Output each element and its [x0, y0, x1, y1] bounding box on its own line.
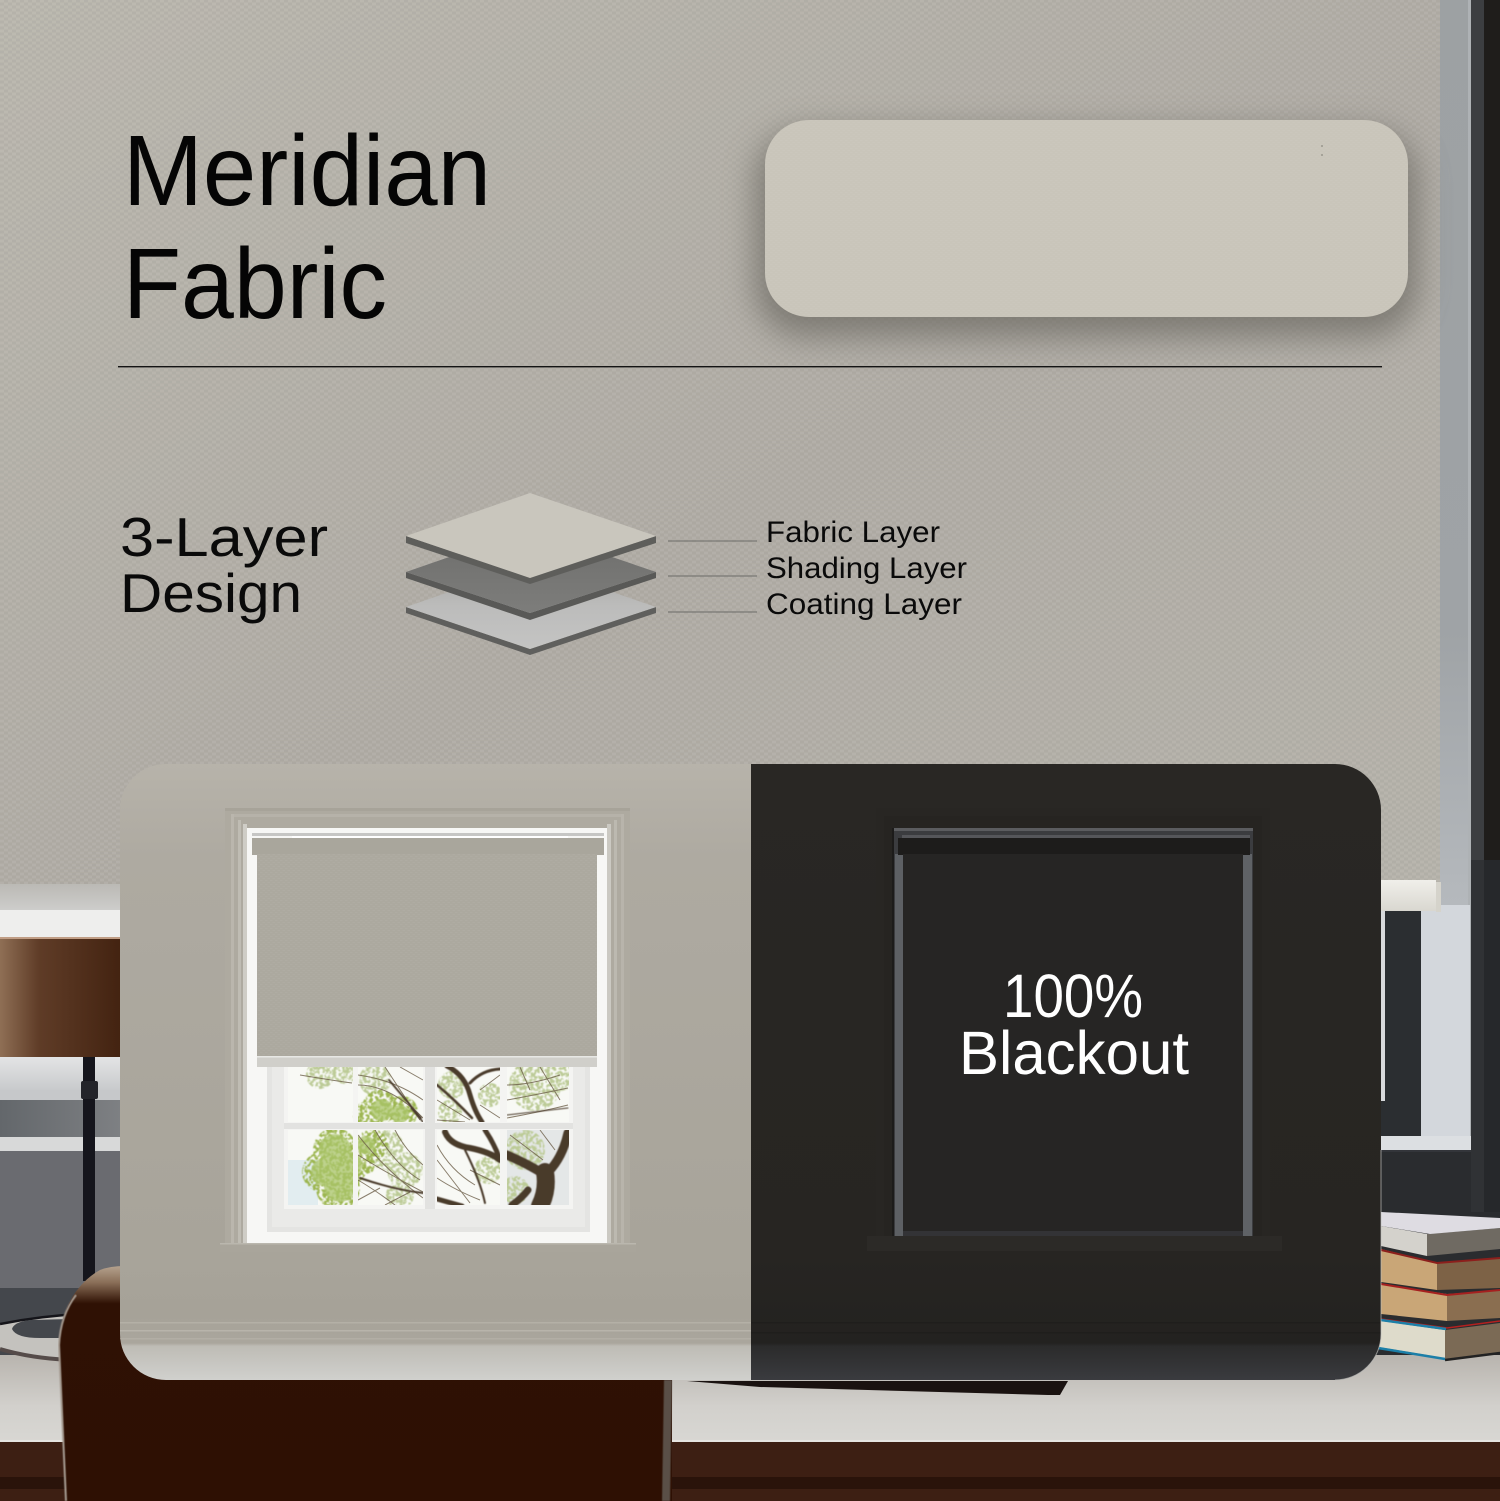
- window sill: [220, 1243, 636, 1244]
- chair: [59, 1266, 672, 1501]
- laptop edge on desk: [687, 1381, 1068, 1395]
- coating layer: [406, 564, 656, 655]
- label: shading layer: Shading Layer: [766, 552, 967, 585]
- window sash: [267, 1060, 590, 1232]
- subheading: 3-Layer Design: [120, 506, 328, 624]
- subheading: 3-Layer Design: 3-Layer: [120, 506, 328, 568]
- label: fabric layer: Fabric Layer: [766, 516, 940, 549]
- layer labels: [668, 516, 967, 621]
- foliage light: [306, 1067, 569, 1205]
- books stack: [1378, 1212, 1500, 1360]
- fabric swatch: [755, 120, 1418, 337]
- trees through panes: [288, 1067, 569, 1205]
- desk: [0, 1355, 1500, 1501]
- dark window sill: [867, 1236, 1282, 1251]
- label: coating layer: Coating Layer: [766, 588, 962, 621]
- window casing: [225, 808, 630, 1244]
- roller blind: [252, 833, 604, 1067]
- subheading: 3-Layer Design: Design: [120, 562, 302, 624]
- panel: dark side: [751, 764, 1381, 1380]
- panel: light side: [120, 764, 751, 1380]
- wall fabric blind: [0, 0, 1440, 884]
- blackout label: Blackout: [959, 1019, 1189, 1087]
- left outdoor window bands: [0, 880, 130, 1358]
- foliage dense: [302, 1090, 418, 1210]
- comparison card: [120, 764, 1381, 1380]
- dark roller blind: [898, 835, 1250, 1236]
- title: [123, 115, 491, 340]
- blackout label: 100%: [1003, 962, 1143, 1030]
- layer diagram: [406, 493, 656, 655]
- dark window casing: [892, 828, 1253, 1236]
- lamp: [0, 937, 130, 1362]
- window frame right side: [1381, 0, 1500, 1212]
- fabric layer: [406, 493, 656, 584]
- shading layer: [406, 529, 656, 620]
- title: Fabric: [123, 228, 387, 340]
- blackout label: [964, 974, 1189, 1074]
- roller bar: [1381, 880, 1441, 912]
- title: Meridian: [123, 115, 491, 227]
